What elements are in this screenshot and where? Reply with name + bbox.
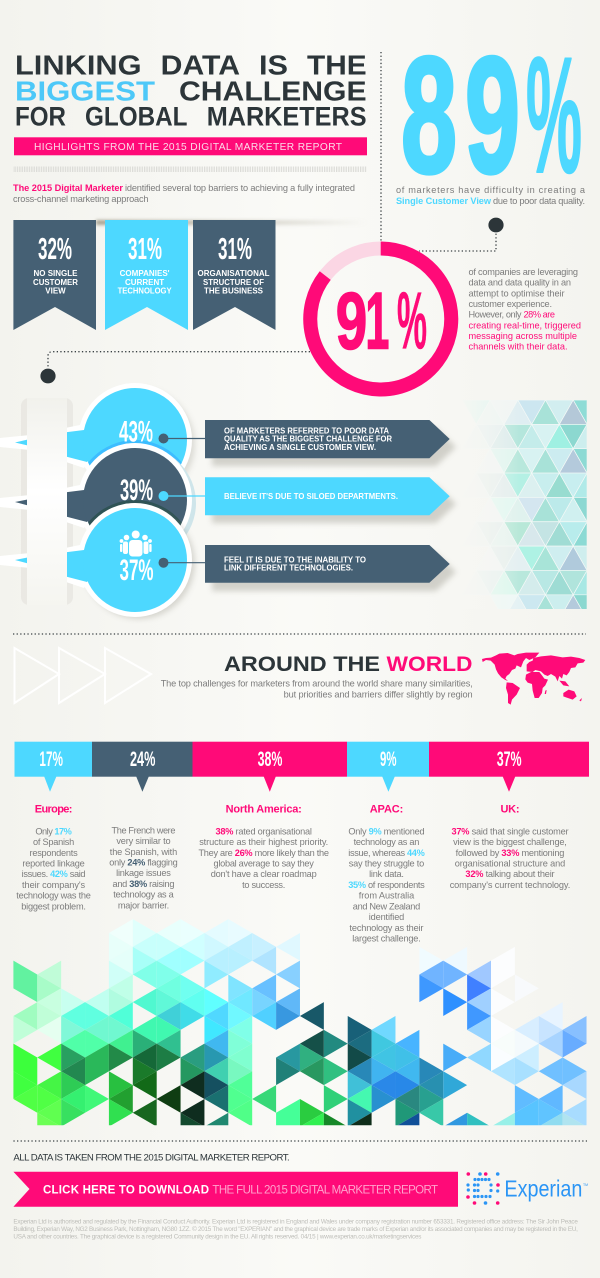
text column: APAC: technology as an: [354, 837, 419, 847]
ribbon: companies' current technology: TECHNOLOGY: [118, 287, 172, 296]
world section intro: [161, 679, 473, 699]
ribbon: no single customer view: CUSTOMER: [33, 278, 78, 287]
icon: group of people: [120, 530, 152, 556]
heading: around the world: WORLD: [386, 652, 472, 676]
title: MARKETERS: [207, 102, 367, 132]
ribbon: organisational structure: STRUCTURE OF: [203, 278, 264, 287]
text column: APAC: technology as their: [350, 923, 423, 933]
text column: Europe: their company's: [22, 880, 86, 890]
big stat 89%: 9: [465, 23, 520, 207]
world section intro: but priorities and barriers differ slightly by region: [284, 689, 473, 699]
donut chart 91%: [310, 248, 451, 390]
legal text: USA and other countries. The graphical device is a registered Community design in the EU. All rights reserved. 04/15 | www.experian.co.uk/marketingservices: [13, 1234, 421, 1241]
91% description: channels with their data.: [468, 342, 568, 352]
text column: APAC: identified: [369, 912, 404, 922]
big stat 89%: [401, 23, 582, 207]
region: APAC 9%: 9%: [380, 748, 397, 771]
arrow banner: poor data quality: ACHIEVING A SINGLE CUSTOMER VIEW.: [224, 442, 376, 452]
ribbon: companies' current technology: [105, 220, 188, 330]
91% description: customer experience.: [468, 299, 552, 309]
download banner: CLICK HERE TO DOWNLOAD: [43, 1184, 209, 1196]
text column: North America: North America:: [226, 804, 302, 816]
arrow banner: inability to link: LINK DIFFERENT TECHNOLOGIES.: [224, 562, 353, 572]
bubble: 37% with people icon: [0, 503, 195, 619]
91% description: messaging across multiple: [468, 331, 577, 341]
triangle mosaic: upper right: [478, 400, 587, 609]
text column: North America: They are 26% more likely than the: [198, 848, 329, 858]
subtitle banner: HIGHLIGHTS FROM THE 2015 DIGITAL MARKETER REPORT: [34, 142, 342, 153]
title: THE: [307, 49, 367, 80]
icon: world map: [482, 653, 585, 705]
intro text: cross-channel marketing approach: [13, 194, 148, 204]
91% description: of companies are leveraging: [468, 267, 578, 277]
connector dot: 43%: [158, 434, 205, 444]
ribbon: no single customer view: 32%: [38, 231, 72, 266]
Experian logo: TM: [583, 1183, 588, 1187]
text column: France: [109, 825, 178, 910]
text column: France: major barrier.: [118, 900, 169, 910]
text column: Europe: Europe:: [35, 804, 72, 816]
donut chart 91%: %: [397, 276, 427, 366]
text column: Europe: Only 17%: [35, 826, 72, 836]
heading: around the world: [224, 652, 472, 676]
region: France 24%: [92, 742, 192, 792]
intro text: The 2015 Digital Marketer: [13, 183, 123, 193]
region: North America 38%: 38%: [258, 748, 283, 771]
text column: UK: view is the biggest challenge,: [453, 837, 567, 847]
arrow banner: poor data quality: [205, 420, 456, 466]
triangle mosaic: lower band: [13, 919, 587, 1140]
ribbon: companies' current technology: 31%: [128, 231, 162, 266]
text column: Europe: technology was the: [16, 891, 91, 901]
ribbon: organisational structure: THE BUSINESS: [204, 287, 264, 296]
arrow banner: inability to link: FEEL IT IS DUE TO THE INABILITY TO: [224, 554, 367, 564]
decorative outline arrows: [14, 648, 151, 703]
arrow banner: poor data quality: OF MARKETERS REFERRED TO POOR DATA: [224, 426, 389, 436]
connector from ring to bubbles: [40, 352, 310, 383]
text column: APAC: 35% of respondents: [348, 880, 425, 890]
text column: UK: UK:: [500, 804, 520, 816]
text column: APAC: link data.: [369, 869, 404, 879]
text column: UK: company's current technology.: [450, 880, 570, 890]
region: UK 37%: [429, 742, 589, 792]
text column: APAC: and New Zealand: [353, 902, 420, 912]
text column: UK: [450, 804, 570, 890]
text column: France: linkage issues: [116, 868, 171, 878]
region: Europe 17%: [14, 742, 92, 792]
legal text: Building, Experian Way, NG2 Business Park, Nottingham, NG80 1ZZ. © 2015 The word "EXPERIAN" and the graphical device are trade marks of Experian and/or its associated companies and may be registered in the EU,: [13, 1225, 578, 1233]
91% description: creating real-time, triggered: [468, 320, 581, 330]
91% description: 28% are: [524, 310, 555, 320]
89% caption: due to poor data quality.: [493, 196, 585, 206]
bubble: 43%: 43%: [119, 416, 153, 449]
title: BIGGEST: [15, 76, 155, 107]
text column: France: technology as a: [113, 890, 175, 900]
text column: APAC: largest challenge.: [352, 934, 421, 944]
title: CHALLENGE: [179, 76, 367, 107]
ribbon: organisational structure: 31%: [218, 231, 252, 266]
ribbon: no single customer view: NO SINGLE: [33, 269, 78, 278]
intro text: identified several top barriers to achieving a fully integrated: [125, 183, 355, 193]
text column: France: only 24% flagging: [109, 858, 178, 868]
ribbon: no single customer view: VIEW: [45, 287, 66, 296]
subtitle banner: [14, 137, 367, 155]
text column: UK: 32% talking about their: [465, 869, 555, 879]
text column: France: very similar to: [116, 836, 171, 846]
89% caption: of marketers have difficulty in creating a: [396, 185, 586, 195]
91% description: data and data quality in an: [468, 278, 571, 288]
text column: APAC: from Australia: [359, 891, 415, 901]
text column: UK: 37% said that single customer: [451, 826, 569, 836]
region: France 24%: 24%: [130, 748, 156, 771]
91% description: [468, 267, 581, 352]
text column: North America: [198, 804, 329, 890]
text column: North America: to success.: [242, 880, 285, 890]
bubble: 37% with people icon: 37%: [120, 554, 154, 587]
text column: Europe: reported linkage: [22, 858, 85, 868]
ribbon: companies' current technology: CURRENT: [125, 278, 164, 287]
text column: APAC: [348, 804, 425, 944]
connector from 89% to ring: [419, 218, 504, 251]
text column: APAC: APAC:: [370, 804, 403, 816]
regional percentage bar: [14, 742, 589, 792]
title: FOR: [15, 102, 66, 132]
title: GLOBAL: [85, 102, 188, 132]
title: LINKING: [15, 49, 142, 80]
donut chart 91%: 1: [365, 276, 389, 366]
text column: Europe: of Spanish: [33, 837, 74, 847]
source note: ALL DATA IS TAKEN FROM THE 2015 DIGITAL MARKETER REPORT.: [13, 1153, 290, 1164]
legal text: Experian Ltd is authorised and regulated by the Financial Conduct Authority. Experian Ltd is registered in England and Wales under company registration number 653331. Registered office address: The Sir John Peace: [13, 1218, 578, 1225]
91% description: However, only: [468, 310, 522, 320]
Experian logo: Experian: [504, 1176, 582, 1202]
text column: France: the Spanish, with: [110, 847, 177, 857]
text column: UK: followed by 33% mentioning: [456, 848, 564, 858]
legal text: [13, 1218, 578, 1241]
text column: APAC: Only 9% mentioned: [348, 826, 425, 836]
text column: North America: global average to say they: [214, 858, 314, 868]
Experian logo: [466, 1172, 588, 1205]
heading: around the world: AROUND THE: [224, 652, 380, 676]
intro text: [13, 183, 355, 204]
region: UK 37%: 37%: [497, 748, 522, 771]
region: North America 38%: [192, 742, 347, 792]
download banner: [13, 1172, 458, 1207]
title: DATA: [161, 49, 240, 80]
download banner: THE FULL 2015 DIGITAL MARKETER REPORT: [212, 1184, 438, 1196]
text column: Europe: issues. 42% said: [22, 869, 86, 879]
region: APAC 9%: [347, 742, 429, 792]
speech bubbles with white band: [0, 383, 196, 620]
region: Europe 17%: 17%: [39, 748, 63, 771]
ribbon: organisational structure: ORGANISATIONAL: [198, 269, 270, 278]
bubble: 43%: [0, 383, 196, 474]
ribbon: companies' current technology: COMPANIES': [120, 269, 170, 278]
connector dot: 37%: [158, 558, 205, 568]
text column: Europe: respondents: [30, 848, 78, 858]
ribbon: no single customer view: [13, 220, 96, 330]
arrow banner: siloed departments: [205, 477, 456, 523]
ribbon: organisational structure: [193, 220, 276, 330]
world section intro: The top challenges for marketers from around the world share many similarities,: [161, 679, 473, 689]
connector dot: 39%: [158, 491, 205, 501]
arrow banner: poor data quality: QUALITY AS THE BIGGEST CHALLENGE FOR: [224, 434, 392, 444]
text column: North America: 38% rated organisational: [216, 826, 312, 836]
arrow banner: siloed departments: BELIEVE IT'S DUE TO SILOED DEPARTMENTS.: [224, 491, 398, 501]
arrow banner: inability to link: [205, 545, 456, 591]
text column: France: and 38% raising: [112, 879, 174, 889]
89% caption: [396, 185, 586, 206]
icon: Experian dot matrix: [466, 1172, 500, 1205]
big stat 89%: 8: [401, 23, 457, 207]
text column: APAC: say they struggle to: [349, 858, 424, 868]
title: IS: [259, 49, 288, 80]
text column: Europe: biggest problem.: [21, 902, 86, 912]
text column: Europe: [16, 804, 91, 912]
text column: UK: organisational structure and: [455, 858, 565, 868]
text column: France: The French were: [112, 825, 175, 835]
89% caption: Single Customer View: [396, 196, 492, 206]
text column: North America: don't have a clear roadmap: [211, 869, 317, 879]
title: [15, 49, 367, 132]
91% description: attempt to optimise their: [468, 288, 564, 298]
text column: APAC: issue, whereas 44%: [348, 848, 425, 858]
text column: North America: structure as their highest priority.: [199, 837, 328, 847]
bubble: 39%: 39%: [120, 474, 153, 507]
bubble: 39%: [0, 443, 196, 535]
donut chart 91%: 9: [336, 276, 367, 366]
